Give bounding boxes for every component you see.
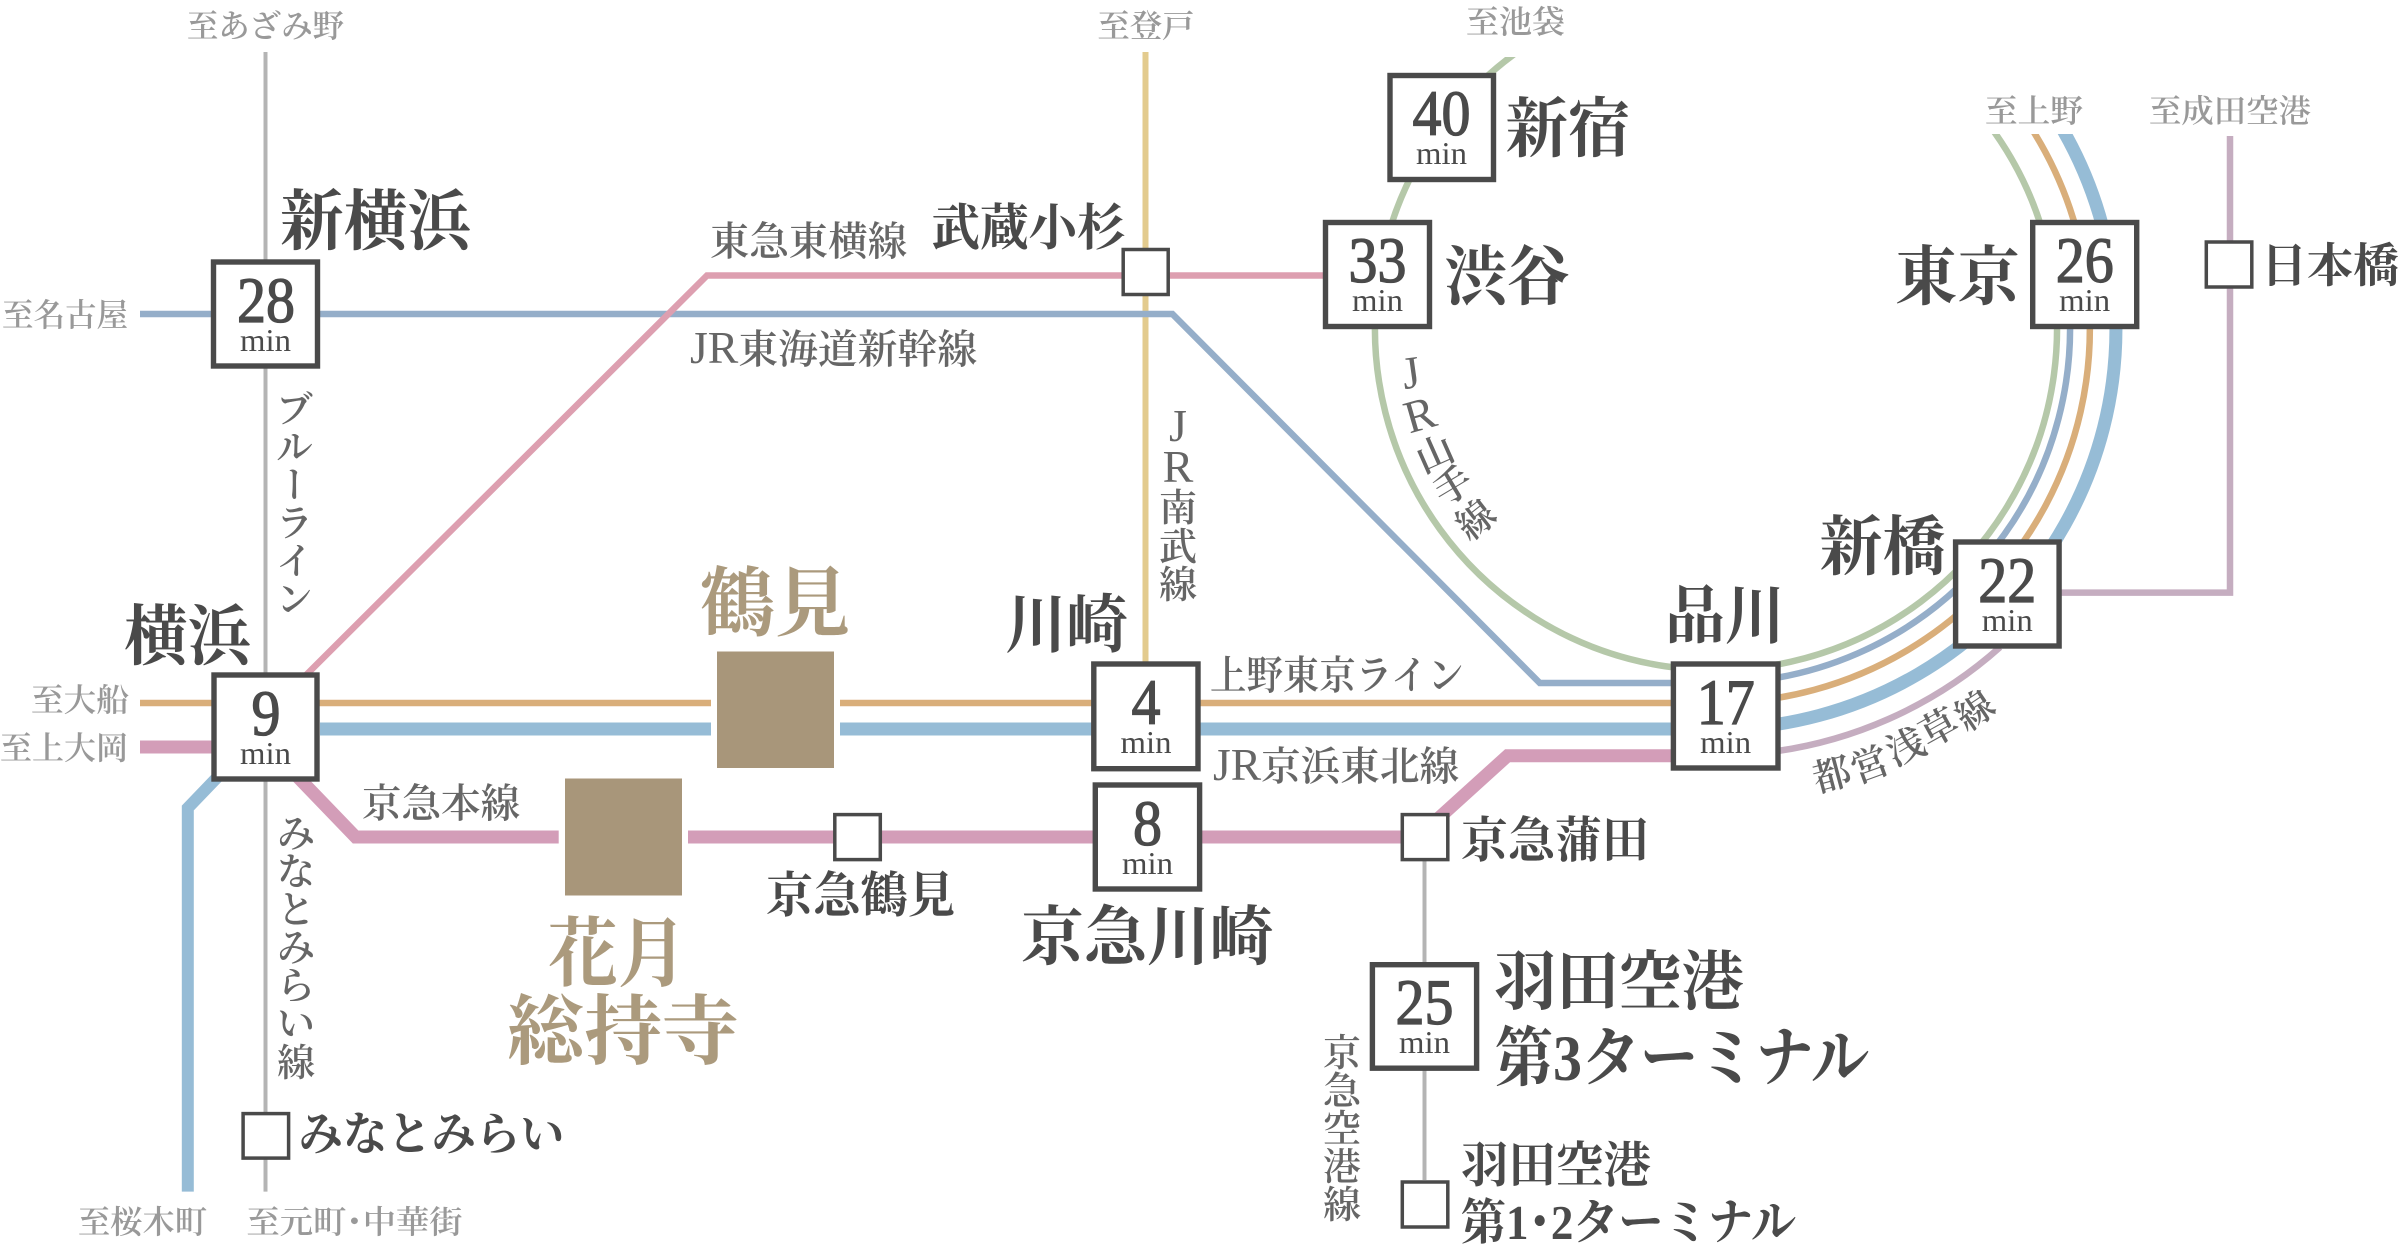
- station: Yokohama: [124, 601, 317, 779]
- to Ofuna: 至大船: [31, 682, 129, 718]
- Minatomirai line label: と: [277, 890, 315, 932]
- Asakusa label: 浅: [1881, 721, 1932, 775]
- station: Haneda T1-2: 羽田空港: [1461, 1138, 1651, 1193]
- Nambu label: 南: [1159, 488, 1197, 530]
- station: Keikyu Kawasaki: 8: [1133, 788, 1162, 860]
- line: JR Nambu: [1142, 52, 1148, 665]
- Yamanote label: J: [1399, 346, 1423, 399]
- station: Keikyu Kawasaki: 京急川崎: [1021, 902, 1273, 974]
- Asakusa label: 線: [1948, 684, 2003, 740]
- station: Shibuya: 33: [1348, 225, 1406, 297]
- Blue Line label: ブルーライン: [269, 389, 311, 617]
- line: Keikyu Airport: [1422, 861, 1426, 1180]
- station: Shin-Yokohama: [214, 186, 474, 366]
- Asakusa label: 都: [1808, 751, 1856, 801]
- Kagetsu name: 花月: [548, 913, 687, 997]
- Keikyu Airport label: 京: [1323, 1033, 1361, 1075]
- Asakusa label: 営: [1845, 740, 1895, 792]
- Minatomirai line label: ら: [277, 966, 315, 1008]
- to Narita: 至成田空港: [2149, 93, 2311, 129]
- line: Keihin Tohoku: [320, 120, 2116, 729]
- station: Kawasaki: 川崎: [1006, 590, 1128, 661]
- line: Keikyu main: [266, 744, 1680, 837]
- station: Shimbashi: min: [1982, 602, 2033, 638]
- station: Shinagawa: [1665, 581, 1785, 768]
- station: Shimbashi: 新橋: [1820, 512, 1946, 584]
- Yamanote label: [1398, 346, 1505, 549]
- Asakusa label: [1808, 684, 2003, 801]
- Keikyu Airport label: 港: [1323, 1147, 1361, 1189]
- station: Tokyo: min: [2059, 282, 2110, 318]
- station: Shin-Yokohama: min: [240, 322, 291, 358]
- line: Keihin Tohoku to Sakuragicho: [188, 762, 232, 1192]
- station: Musashi-Kosugi: 武蔵小杉: [932, 200, 1126, 256]
- Toyoko label: 東急東横線: [710, 219, 907, 264]
- station: Haneda T3: 第3ターミナル: [1495, 1023, 1869, 1095]
- station: Haneda T3: 羽田空港: [1494, 947, 1744, 1019]
- Nambu label: R: [1163, 441, 1194, 492]
- line name labels: [269, 219, 2003, 1227]
- station: Shinjuku: 40: [1412, 78, 1470, 150]
- station: Shibuya: 渋谷: [1444, 242, 1570, 314]
- Kagetsu Sojiji square: [565, 778, 682, 896]
- line: Tokaido Shinkansen: [140, 274, 2070, 683]
- line: Tokyu Toyoko: [280, 276, 1325, 701]
- station: Keikyu Kawasaki: min: [1122, 845, 1173, 881]
- Yamanote label: 線: [1449, 493, 1505, 549]
- Minatomirai line label: 線: [277, 1043, 315, 1085]
- station: Kawasaki: 4: [1132, 667, 1160, 739]
- line: JR Yamanote: [1375, 50, 2057, 670]
- Keikyu main label: 京急本線: [362, 781, 520, 826]
- Keikyu Airport label: 線: [1323, 1185, 1361, 1227]
- Tsurumi name: 鶴見: [700, 563, 850, 647]
- line: Keikyu to Kamiooka: [140, 740, 220, 754]
- station: Yokohama: min: [240, 735, 291, 771]
- station: Shinjuku: min: [1416, 135, 1467, 171]
- to Nagoya: 至名古屋: [2, 297, 128, 333]
- station: Shinjuku: [1390, 76, 1630, 180]
- to Motomachi: 至元町･中華街: [246, 1204, 462, 1240]
- Minatomirai line label: な: [277, 852, 315, 894]
- station: Shibuya: min: [1352, 282, 1403, 318]
- Sojiji name: 総持寺: [507, 991, 739, 1075]
- station: Shinagawa: 17: [1697, 667, 1755, 739]
- Nambu label: J: [1169, 400, 1187, 451]
- station: Nihonbashi: 日本橋: [2261, 241, 2399, 293]
- station: Minatomirai: みなとみらい: [298, 1109, 564, 1160]
- rail lines: [140, 50, 2230, 1192]
- to Ueno: 至上野: [1985, 93, 2083, 129]
- to Azamino: 至あざみ野: [187, 8, 344, 44]
- station: Kawasaki: min: [1120, 724, 1172, 760]
- Minatomirai line label: み: [277, 814, 315, 856]
- Yamanote label: 山: [1410, 428, 1461, 482]
- station: Tokyo: 26: [2056, 225, 2114, 297]
- station: Kawasaki: [1006, 590, 1198, 769]
- Shinkansen label: JR東海道新幹線: [690, 322, 977, 373]
- station: Shimbashi: [1820, 512, 2059, 646]
- station: Shinagawa: 品川: [1665, 581, 1785, 652]
- Minatomirai line label: み: [277, 928, 315, 970]
- to Ikebukuro: 至池袋: [1466, 4, 1565, 40]
- to Noborito: 至登戸: [1098, 8, 1194, 44]
- Minatomirai line label: い: [277, 1004, 315, 1046]
- station: Haneda T3: min: [1399, 1024, 1450, 1060]
- station: Tokyo: [1895, 222, 2137, 326]
- station: Shimbashi: 22: [1978, 545, 2036, 617]
- station: Haneda T1-2: [1402, 1138, 1796, 1246]
- Tsurumi square: [717, 652, 834, 768]
- station: Shibuya: [1326, 222, 1570, 326]
- Nambu label: 線: [1159, 565, 1197, 607]
- line: Ueno Tokyo: [140, 120, 2090, 703]
- Keihin Tohoku label: JR京浜東北線: [1213, 739, 1459, 790]
- station: Yokohama: 横浜: [124, 601, 254, 674]
- line: Blue Line / Minatomirai: [264, 52, 268, 1192]
- Keikyu Airport label: 空: [1323, 1109, 1361, 1151]
- station: Keikyu Tsurumi: 京急鶴見: [766, 868, 955, 923]
- station: Shinagawa: min: [1700, 724, 1751, 760]
- station: Haneda T3: [1372, 947, 1869, 1095]
- station: Shinjuku: 新宿: [1506, 94, 1630, 166]
- station: Shin-Yokohama: 28: [237, 265, 295, 337]
- station: Keikyu Kawasaki: [1021, 785, 1273, 974]
- Nambu label: 武: [1159, 527, 1197, 569]
- to Sakuragicho: 至桜木町: [78, 1204, 207, 1240]
- station: Tokyo: 東京: [1895, 242, 2021, 314]
- line: Asakusa: [1760, 136, 2230, 753]
- Ueno Tokyo label: 上野東京ライン: [1210, 653, 1464, 698]
- station: Musashi-Kosugi: [932, 200, 1168, 294]
- station: Keikyu Tsurumi: [766, 815, 955, 923]
- station: Keikyu Kamata: 京急蒲田: [1461, 813, 1649, 868]
- highlighted stations: [507, 563, 850, 1075]
- station: Yokohama: 9: [252, 678, 280, 750]
- Keikyu Airport label: 急: [1323, 1071, 1363, 1113]
- Yamanote label: R: [1398, 386, 1442, 443]
- station: Haneda T3: 25: [1396, 967, 1454, 1039]
- to Kamiooka: 至上大岡: [0, 730, 128, 766]
- Asakusa label: 草: [1913, 701, 1966, 756]
- Yamanote label: 手: [1426, 459, 1481, 515]
- station: Shin-Yokohama: 新横浜: [280, 186, 474, 259]
